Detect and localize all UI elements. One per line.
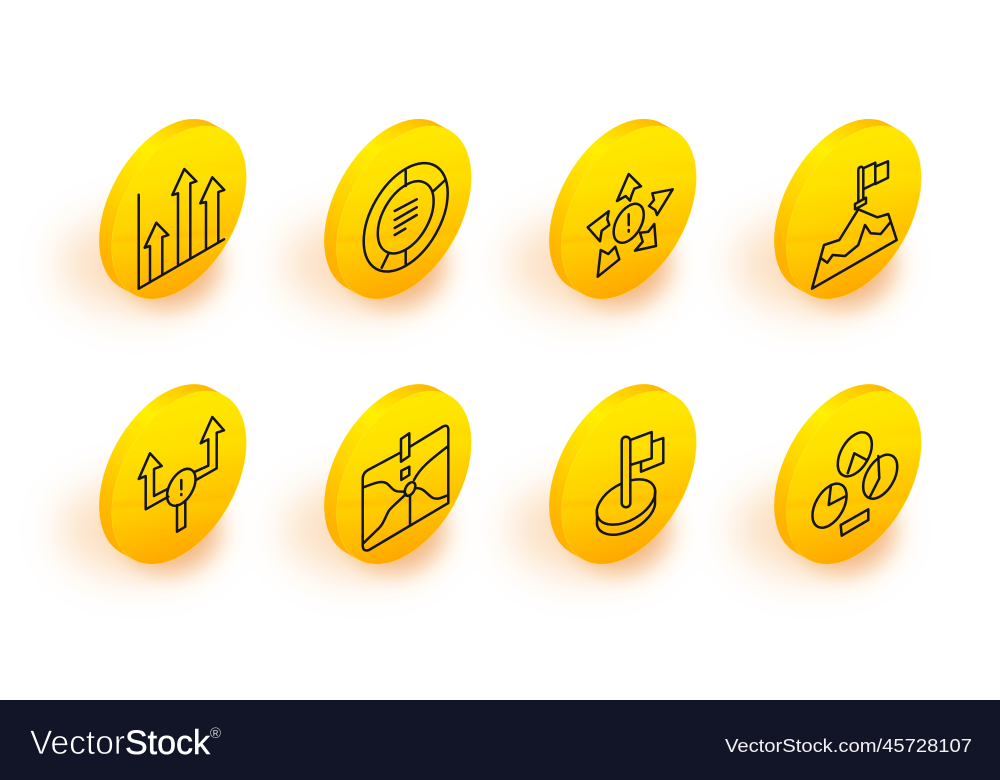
icon: three pie charts and a label bar	[805, 426, 904, 536]
panel: close coin shadows	[120, 220, 895, 573]
panel: pie charts coin	[746, 361, 949, 587]
icon: exclamation circle with two arrows splitting	[139, 417, 224, 532]
footer bar	[0, 700, 1000, 780]
panel: route map coin	[296, 361, 499, 587]
icon: donut chart with text lines	[346, 149, 465, 286]
footer logo: VectorStock	[30, 724, 221, 762]
icon: flag planted on a round base	[589, 432, 663, 535]
panel: scattering arrows coin	[521, 96, 724, 322]
panel: growth arrows chart coin	[71, 96, 274, 322]
footer image id: VectorStock.com/45728107	[725, 736, 972, 756]
footer logo: VectorStock: ®	[210, 725, 221, 742]
icon: bar chart with rising arrows	[139, 169, 224, 289]
panel: donut chart coin	[296, 96, 499, 322]
footer logo: VectorStock: Vector	[30, 724, 125, 762]
icon: folded map with exclamation mark	[363, 426, 448, 550]
footer logo: VectorStock: Stock	[125, 724, 211, 762]
panel: mountain flag coin	[746, 96, 949, 322]
icon: mountain with flag on the summit	[812, 161, 897, 289]
panel: flag on disc coin	[521, 361, 724, 587]
icon: exclamation circle with five arrows	[588, 174, 673, 277]
panel: forking path coin	[71, 361, 274, 587]
panel: wide coin shadows	[60, 216, 891, 577]
